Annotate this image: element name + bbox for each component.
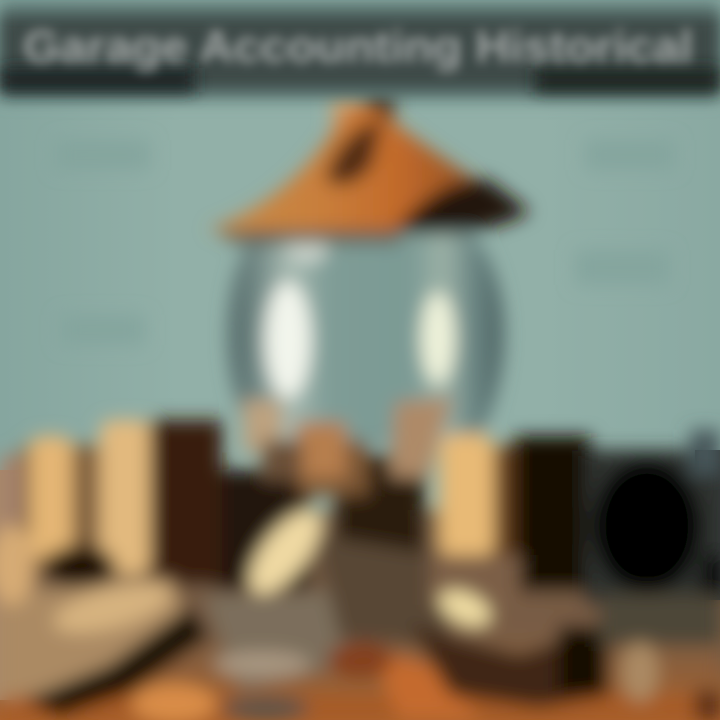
left open book [0,525,210,716]
right edge backing [695,450,720,600]
left books stack [22,420,222,586]
jar body [228,226,504,445]
right foreground dark bowl [410,595,720,720]
jar neck highlight [288,231,328,263]
conical lid [206,105,530,244]
faint wall marks [55,140,675,345]
right books stack [430,434,591,633]
middle dark book block [215,440,425,590]
lid knob [332,80,394,132]
jar right highlight [421,292,455,384]
floor base [0,560,720,720]
title banner [0,0,720,100]
center upper tan books [244,397,452,480]
left edge backing [0,470,30,700]
left dark stripe [25,606,210,716]
table and floor [0,455,720,720]
title text: Garage Accounting Historical [23,21,693,72]
jar left highlight [265,282,311,398]
center pale book [205,499,450,720]
lid dark streak [325,120,382,185]
lid dark edge [395,180,530,233]
right dark round object [585,430,720,606]
